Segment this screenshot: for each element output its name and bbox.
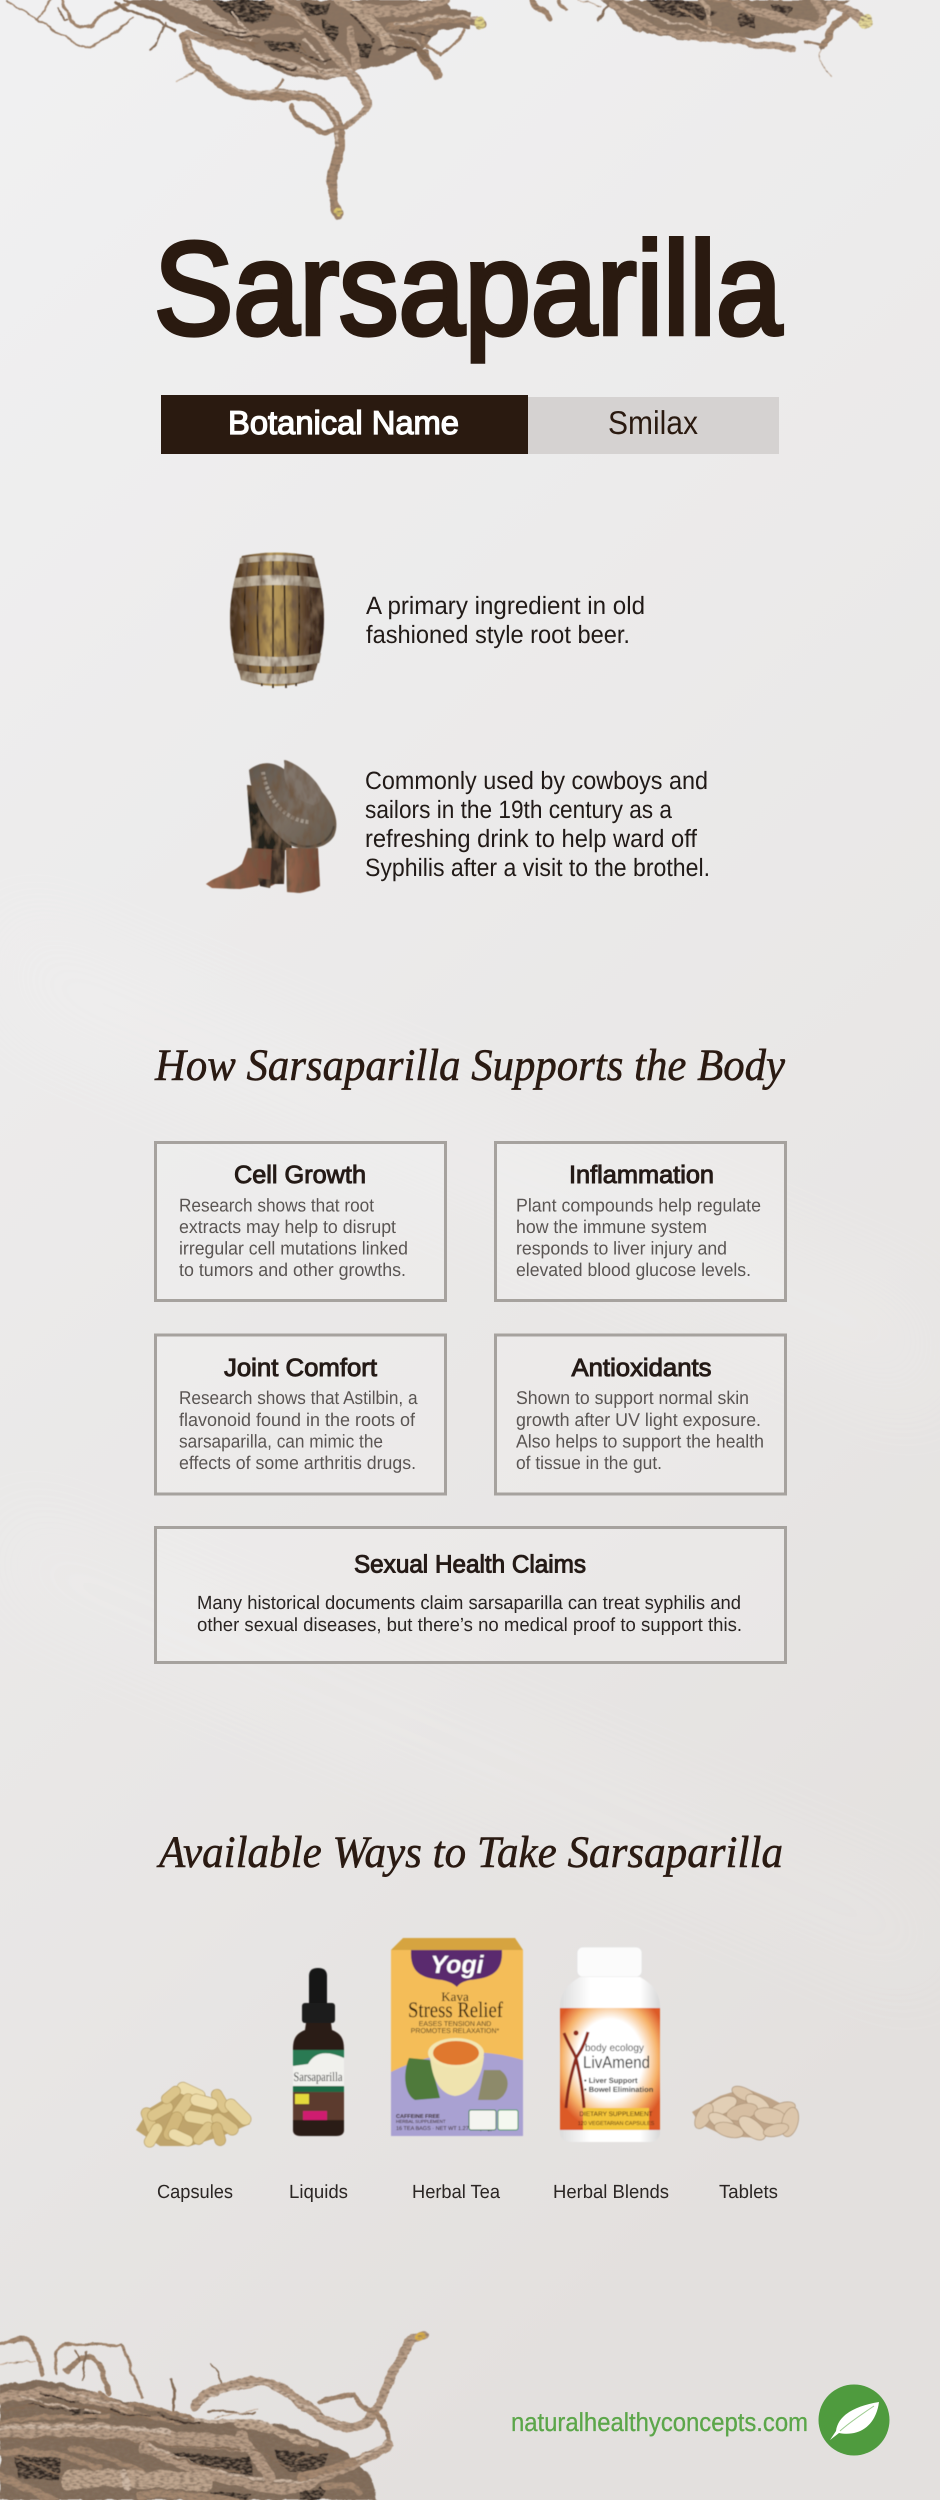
panel: cell growth: extracts may help to disrupt bbox=[179, 1216, 396, 1237]
panel: inflammation: how the immune system bbox=[516, 1216, 707, 1237]
icon: herbal blends bottle: 120 VEGETARIAN CAPSULES bbox=[578, 2121, 655, 2127]
roots: bottom left cluster bbox=[0, 2332, 426, 2500]
roots: top right cluster bbox=[532, 0, 872, 77]
icon: herbal blends bottle bbox=[560, 1947, 660, 2142]
product labels: Tablets bbox=[719, 2182, 778, 2203]
icon: herbal blends bottle: • Liver Support bbox=[584, 2076, 638, 2085]
panel: joint comfort: Research shows that Astilbin, a bbox=[179, 1387, 418, 1408]
icon: herbal tea box: HERBAL SUPPLEMENT bbox=[396, 2119, 446, 2124]
icon: liquid dropper bottle bbox=[293, 1968, 344, 2136]
panel: antioxidants: growth after UV light exposure. bbox=[516, 1409, 761, 1430]
panel: cell growth: Research shows that root bbox=[179, 1194, 374, 1216]
product labels: Herbal Tea bbox=[412, 2182, 500, 2203]
panel: joint comfort: Joint Comfort bbox=[224, 1354, 377, 1382]
panel: cell growth: irregular cell mutations linked bbox=[179, 1238, 408, 1258]
botanical name bar: Smilax bbox=[608, 404, 698, 441]
text: root beer bbox=[366, 592, 645, 649]
text: cowboys and sailors: Commonly used by cowboys and bbox=[365, 767, 708, 795]
botanical name bar: Botanical Name bbox=[228, 404, 459, 441]
icon: herbal blends bottle: • Bowel Elimination bbox=[584, 2085, 654, 2094]
panel: antioxidants: Shown to support normal skin bbox=[516, 1387, 749, 1408]
panel: cell growth bbox=[156, 1142, 446, 1300]
botanical name bar bbox=[161, 395, 779, 454]
heading: how sarsaparilla supports the body: How Sarsaparilla Supports the Body bbox=[154, 1040, 785, 1090]
panel: joint comfort: flavonoid found in the roots of bbox=[179, 1409, 416, 1430]
icon: herbal tea box: PROMOTES RELAXATION* bbox=[411, 2028, 500, 2035]
text: cowboys and sailors bbox=[365, 767, 710, 882]
icon: herbal blends bottle: LivAmend bbox=[583, 2053, 650, 2072]
icon: leaf logo bbox=[818, 2384, 890, 2456]
panel: inflammation: Inflammation bbox=[569, 1161, 714, 1189]
product labels: Herbal Blends bbox=[553, 2182, 669, 2203]
icon: herbal tea box: EASES TENSION AND bbox=[419, 2021, 491, 2028]
icon: tablets bbox=[691, 2083, 802, 2144]
panel: sexual health claims bbox=[156, 1528, 786, 1662]
panel: inflammation bbox=[496, 1142, 786, 1300]
heading: available ways to take sarsaparilla: Available Ways to Take Sarsaparilla bbox=[156, 1827, 783, 1877]
text: cowboys and sailors: sailors in the 19th century as a bbox=[365, 796, 672, 824]
text: cowboys and sailors: Syphilis after a visit to the brothel. bbox=[365, 854, 710, 882]
panel: cell growth: Cell Growth bbox=[234, 1161, 366, 1189]
icon: herbal tea box bbox=[391, 1938, 523, 2136]
icon: herbal blends bottle: DIETARY SUPPLEMENT bbox=[579, 2111, 653, 2118]
icon: cowboy boots and hat bbox=[206, 760, 336, 893]
icon: liquid dropper bottle: Sarsaparilla bbox=[294, 2069, 343, 2084]
panel: joint comfort bbox=[156, 1335, 446, 1494]
icon: herbal blends bottle: body ecology bbox=[585, 2043, 644, 2054]
panel: inflammation: elevated blood glucose levels. bbox=[516, 1259, 751, 1280]
panel: sexual health claims: Sexual Health Claims bbox=[354, 1550, 586, 1578]
product labels: Liquids bbox=[289, 2182, 348, 2203]
panel: inflammation: responds to liver injury and bbox=[516, 1238, 727, 1258]
title: Sarsaparilla bbox=[154, 215, 783, 362]
website url: naturalhealthyconcepts.com bbox=[511, 2407, 808, 2437]
icon: capsules bbox=[136, 2080, 254, 2149]
text: root beer: fashioned style root beer. bbox=[366, 621, 630, 649]
roots: top left cluster bbox=[7, 0, 486, 216]
text: cowboys and sailors: refreshing drink to help ward off bbox=[365, 825, 697, 853]
panel: antioxidants: of tissue in the gut. bbox=[516, 1452, 662, 1473]
text: root beer: A primary ingredient in old bbox=[366, 592, 645, 620]
panel: antioxidants: Also helps to support the health bbox=[516, 1430, 764, 1452]
icon: herbal tea box: Yogi bbox=[430, 1951, 485, 1979]
panel: cell growth: to tumors and other growths. bbox=[179, 1259, 406, 1280]
icon: herbal tea box: Kava bbox=[441, 1989, 469, 2004]
panel: joint comfort: effects of some arthritis drugs. bbox=[179, 1452, 416, 1473]
panel: sexual health claims: Many historical documents claim sarsaparilla can treat syphilis and bbox=[197, 1593, 741, 1614]
icon: herbal tea box: CAFFEINE FREE bbox=[396, 2114, 440, 2120]
product labels bbox=[157, 2182, 778, 2203]
icon: herbal tea box: 16 TEA BAGS · NET WT 1.27 OZ (36g) bbox=[396, 2126, 492, 2132]
icon: herbal tea box: Stress Relief bbox=[408, 1997, 504, 2022]
icon: barrel bbox=[230, 552, 324, 688]
panel: sexual health claims: other sexual diseases, but there’s no medical proof to support this. bbox=[197, 1615, 742, 1636]
panel: joint comfort: sarsaparilla, can mimic the bbox=[179, 1430, 383, 1452]
panel: inflammation: Plant compounds help regulate bbox=[516, 1194, 761, 1216]
panel: antioxidants: Antioxidants bbox=[572, 1354, 712, 1382]
product labels: Capsules bbox=[157, 2182, 233, 2203]
panel: antioxidants bbox=[496, 1335, 786, 1494]
